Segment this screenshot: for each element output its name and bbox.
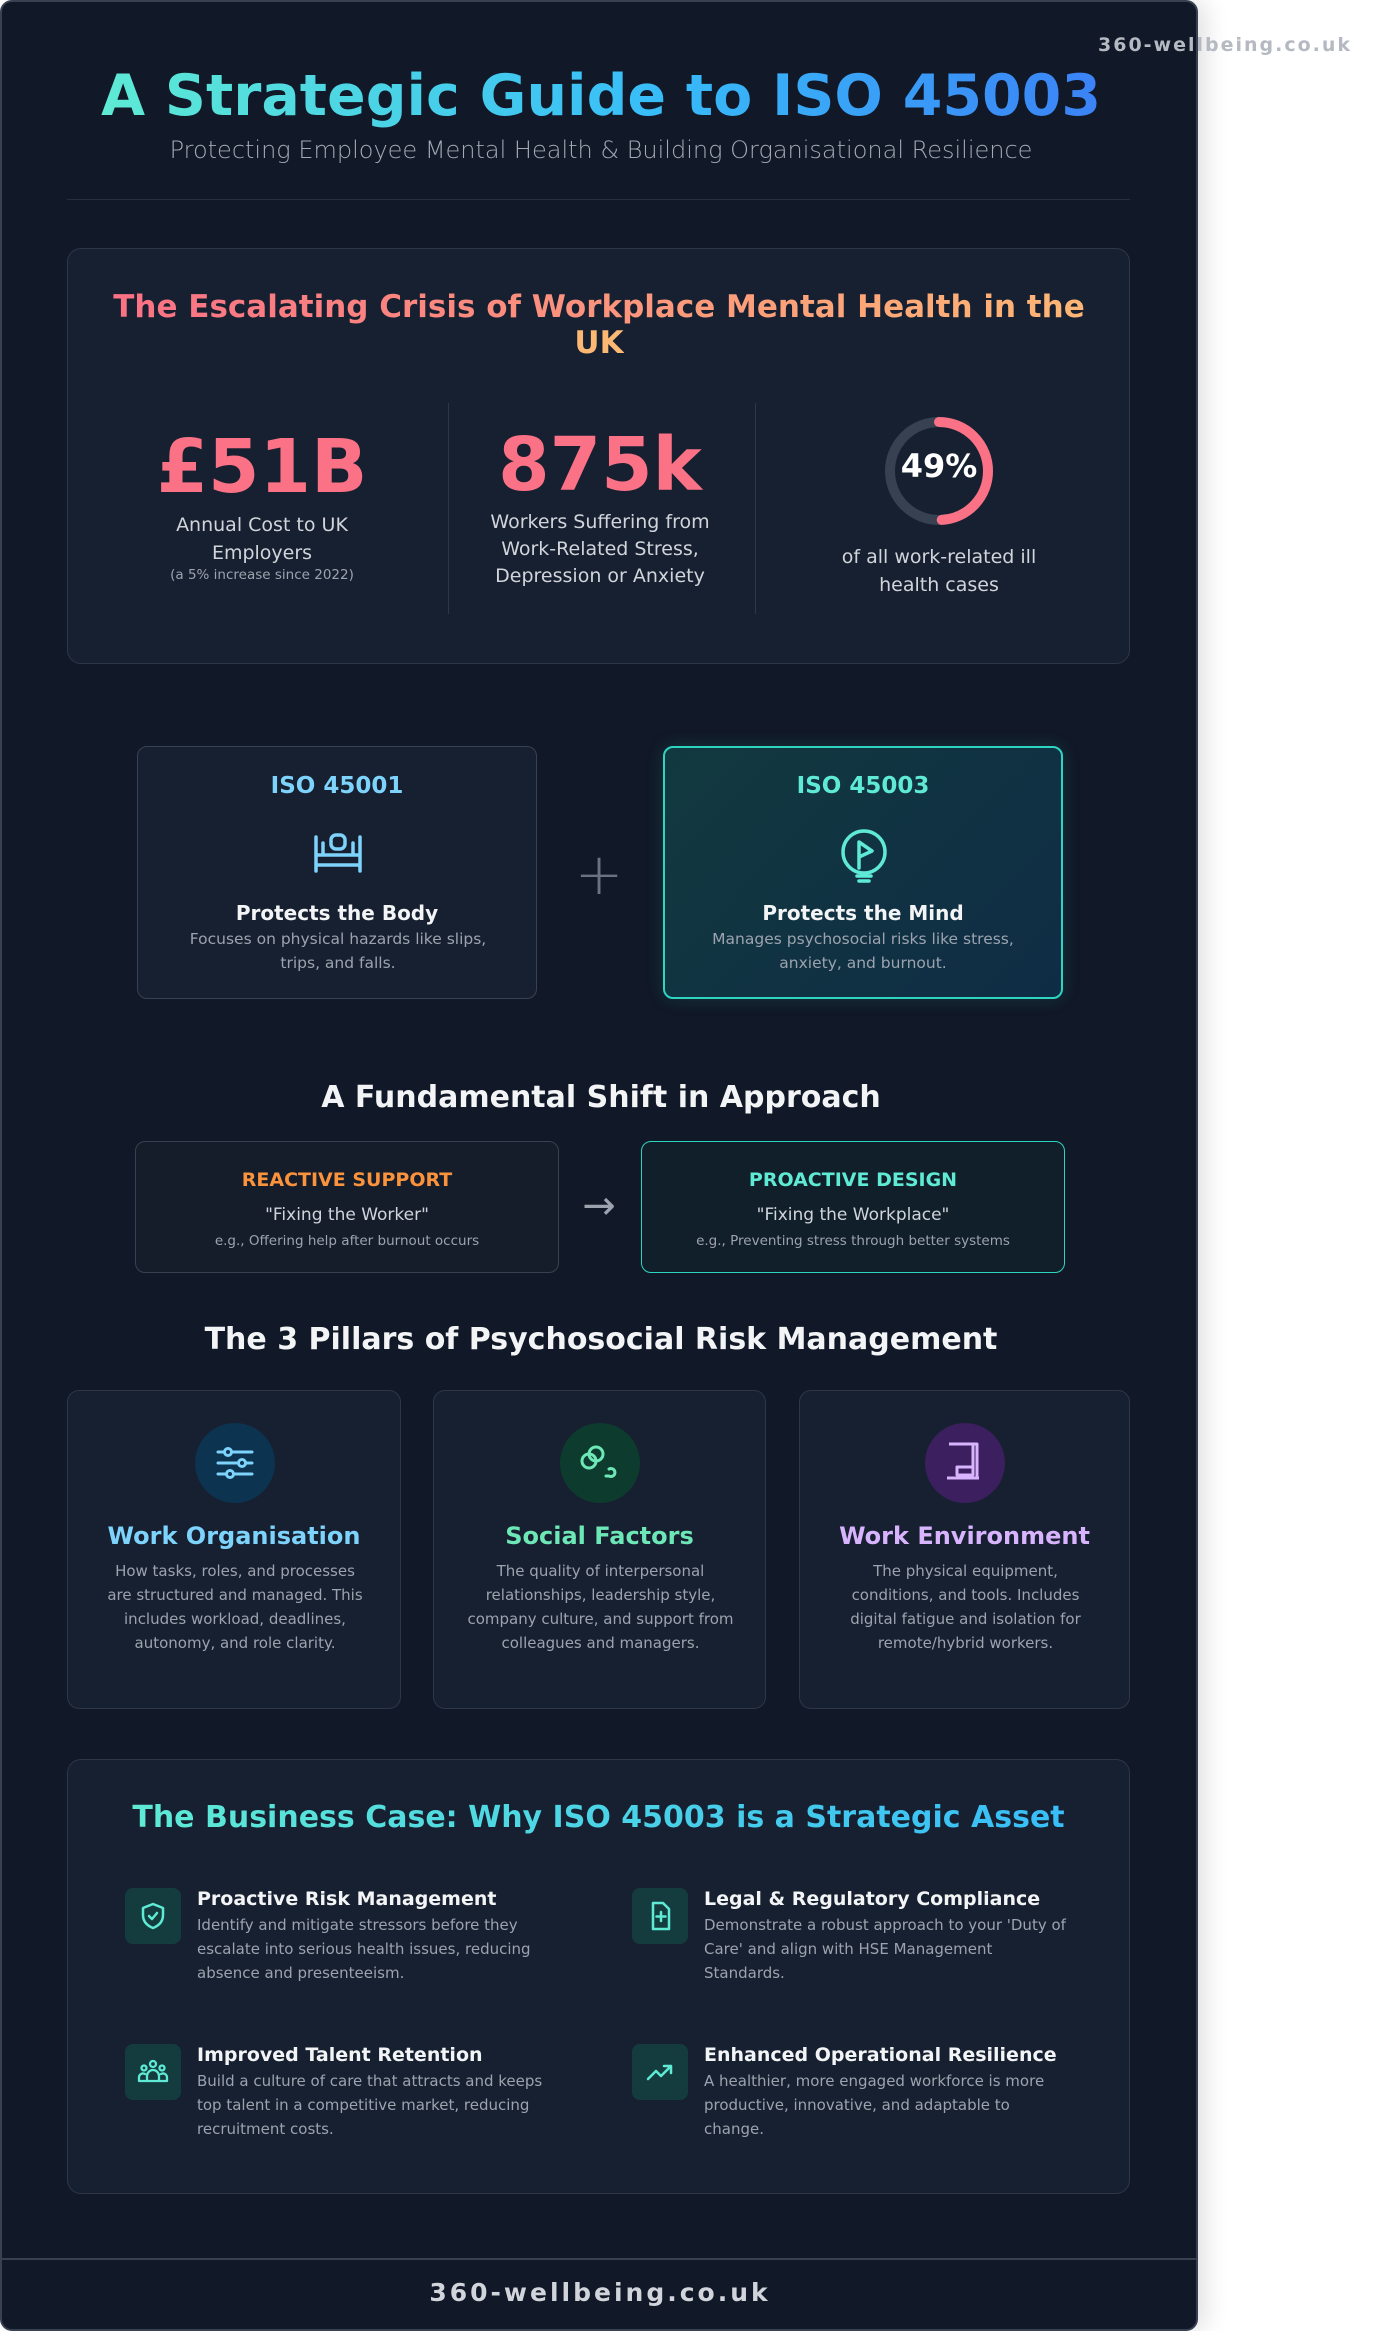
panel: crisis stats (67, 248, 1130, 664)
icon: rings (560, 1423, 640, 1503)
heading: crisis: UK (574, 325, 624, 361)
box: ISO 45003: ISO 45003 (797, 773, 929, 799)
pillar: social factors (433, 1390, 766, 1709)
stat: 51B: (a 5% increase since 2022) (170, 567, 354, 583)
box: proactive: "Fixing the Workplace" (757, 1205, 949, 1225)
item: resilience: A healthier, more engaged workforce is more productive, innovative, and adaptable to change. (704, 2072, 1044, 2138)
icon: shield (125, 1888, 181, 1944)
box: ISO 45001: Focuses on physical hazards like slips, trips, and falls. (190, 930, 486, 972)
item: resilience (632, 2044, 1057, 2138)
box: reactive: "Fixing the Worker" (265, 1205, 429, 1225)
pillar: work environment (799, 1390, 1130, 1709)
box: ISO 45001: ISO 45001 (271, 773, 403, 799)
footer: 360-wellbeing.co.uk (429, 2278, 771, 2307)
heading: shift: A Fundamental Shift in Approach (321, 1080, 881, 1115)
pillar: work organisation: How tasks, roles, and processes are structured and managed. This includes workload, deadlines, autonomy, and role clarity. (107, 1562, 363, 1652)
pillar: work environment: The physical equipment, conditions, and tools. Includes digital fatigue and isolation for remote/hybrid workers. (850, 1562, 1081, 1652)
arrow: → (582, 1183, 616, 1229)
icon: bed/body (314, 833, 362, 873)
stat: 875k: Work-Related Stress, (501, 538, 699, 560)
heading: crisis (113, 289, 1085, 361)
item: legal: Demonstrate a robust approach to your 'Duty of Care' and align with HSE Management Standards. (704, 1916, 1066, 1982)
item: proactive risk: Proactive Risk Management (197, 1888, 496, 1910)
box: proactive: PROACTIVE DESIGN (749, 1169, 957, 1191)
item: talent: Improved Talent Retention (197, 2044, 483, 2066)
heading: crisis: The Escalating Crisis of Workplace Mental Health in the (113, 289, 1085, 325)
box: proactive: e.g., Preventing stress through better systems (696, 1233, 1010, 1249)
icon: mind (841, 829, 887, 883)
item: talent: Build a culture of care that attracts and keeps top talent in a competitive market, reducing recruitment costs. (197, 2072, 542, 2138)
stat: 875k: Depression or Anxiety (495, 565, 705, 587)
stat: 49% donut (842, 417, 1036, 596)
pillar: social factors: The quality of interpersonal relationships, leadership style, company culture, and support from colleagues and managers. (467, 1562, 734, 1652)
box: ISO 45001: Protects the Body (236, 901, 438, 925)
watermark: 360-wellbeing.co.uk (1098, 34, 1352, 56)
box: reactive: e.g., Offering help after burnout occurs (215, 1233, 479, 1249)
stat: 875k (490, 422, 710, 587)
stat: 875k: 875k (498, 422, 702, 508)
pillar: work environment: Work Environment (839, 1522, 1090, 1550)
icon: trend (632, 2044, 688, 2100)
stat: 49% donut: 49% (901, 447, 977, 485)
item: talent (125, 2044, 542, 2138)
icon: plus: + (575, 840, 623, 908)
box: reactive (135, 1141, 559, 1273)
stat: 875k: Workers Suffering from (490, 511, 710, 533)
pillar: work organisation (67, 1390, 401, 1709)
box: reactive: REACTIVE SUPPORT (242, 1169, 452, 1191)
box: ISO 45003: Manages psychosocial risks like stress, anxiety, and burnout. (712, 930, 1014, 972)
pillar: social factors: Social Factors (505, 1522, 694, 1550)
subtitle: Protecting Employee Mental Health & Building Organisational Resilience (170, 136, 1032, 164)
item: resilience: Enhanced Operational Resilience (704, 2044, 1057, 2066)
item: legal (632, 1888, 1066, 1982)
stat: 51B: Employers (212, 542, 312, 564)
heading: business case: The Business Case: Why ISO 45003 is a Strategic Asset (132, 1800, 1065, 1835)
box: ISO 45001 (137, 746, 537, 999)
icon: document (632, 1888, 688, 1944)
box: ISO 45003: Protects the Mind (762, 901, 964, 925)
box: proactive (641, 1141, 1065, 1273)
box: ISO 45003 (663, 746, 1063, 999)
stat: 51B: Annual Cost to UK (176, 514, 348, 536)
icon: sliders (195, 1423, 275, 1503)
pillar: work organisation: Work Organisation (108, 1522, 360, 1550)
panel: business case (67, 1759, 1130, 2194)
stat: 51B (157, 424, 367, 583)
stat: 51B: £51B (157, 424, 367, 510)
item: proactive risk (125, 1888, 531, 1982)
stat: 49% donut: health cases (879, 574, 999, 596)
item: legal: Legal & Regulatory Compliance (704, 1888, 1040, 1910)
item: proactive risk: Identify and mitigate stressors before they escalate into serious health issues, reducing absence and presenteeism. (197, 1916, 531, 1982)
stat: 49% donut: of all work-related ill (842, 546, 1036, 568)
icon: laptop (925, 1423, 1005, 1503)
title: A Strategic Guide to ISO 45003 (101, 63, 1101, 129)
icon: people (125, 2044, 181, 2100)
heading: pillars: The 3 Pillars of Psychosocial Risk Management (205, 1322, 997, 1357)
